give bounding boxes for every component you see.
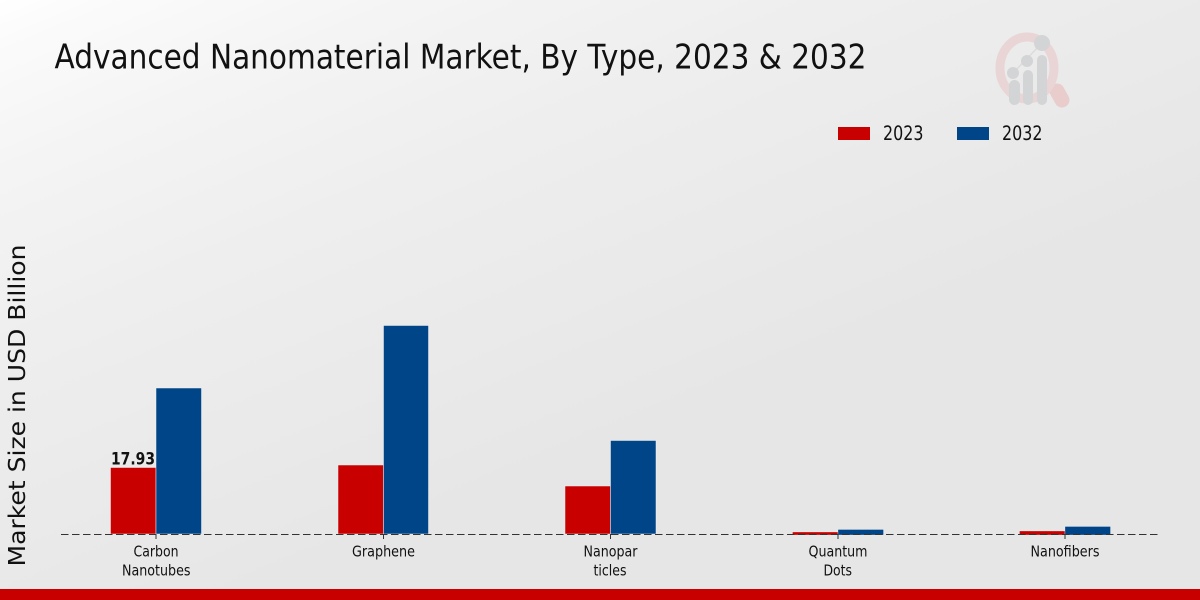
category label: Carbon Nanotubes: Carbon xyxy=(134,542,178,560)
legend swatch 2023 xyxy=(838,127,870,140)
legend label 2023: 2023 xyxy=(883,122,924,145)
bars: Nanoparticles xyxy=(565,440,656,534)
category label: Quantum Dots: Quantum xyxy=(808,542,868,560)
category label: Quantum Dots: Dots xyxy=(824,562,852,580)
category label: Graphene: Graphene xyxy=(352,542,415,560)
watermark logo xyxy=(1000,35,1062,105)
bars: Nanofibers xyxy=(1020,526,1110,535)
legend xyxy=(838,122,1042,145)
legend swatch 2032 xyxy=(957,127,989,140)
category label: Nanoparticles: Nanopar xyxy=(584,542,638,560)
category label: Quantum Dots xyxy=(808,542,868,580)
logo ring xyxy=(1000,37,1054,99)
logo handle xyxy=(1057,91,1062,100)
legend label 2032: 2032 xyxy=(1002,122,1042,145)
logo bars and dots xyxy=(1007,35,1050,105)
category label: Nanofibers: Nanofibers xyxy=(1030,542,1100,560)
ticks xyxy=(156,534,1065,539)
baseline xyxy=(61,534,1160,536)
title: Advanced Nanomaterial Market, By Type, 2023 & 2032 xyxy=(54,38,866,78)
category label: Nanoparticles xyxy=(584,542,638,580)
footer bar xyxy=(0,589,1200,600)
category label: Carbon Nanotubes: Nanotubes xyxy=(122,562,190,580)
bars: Graphene xyxy=(338,326,428,534)
bars: Carbon Nanotubes xyxy=(110,388,202,534)
y axis label: Market Size in USD Billion xyxy=(5,244,31,566)
value label: 17.93 xyxy=(111,450,155,468)
bar chart xyxy=(61,326,1160,580)
category label: Carbon Nanotubes xyxy=(122,542,190,580)
category label: Nanoparticles: ticles xyxy=(594,562,626,580)
bars: Quantum Dots xyxy=(792,530,884,535)
